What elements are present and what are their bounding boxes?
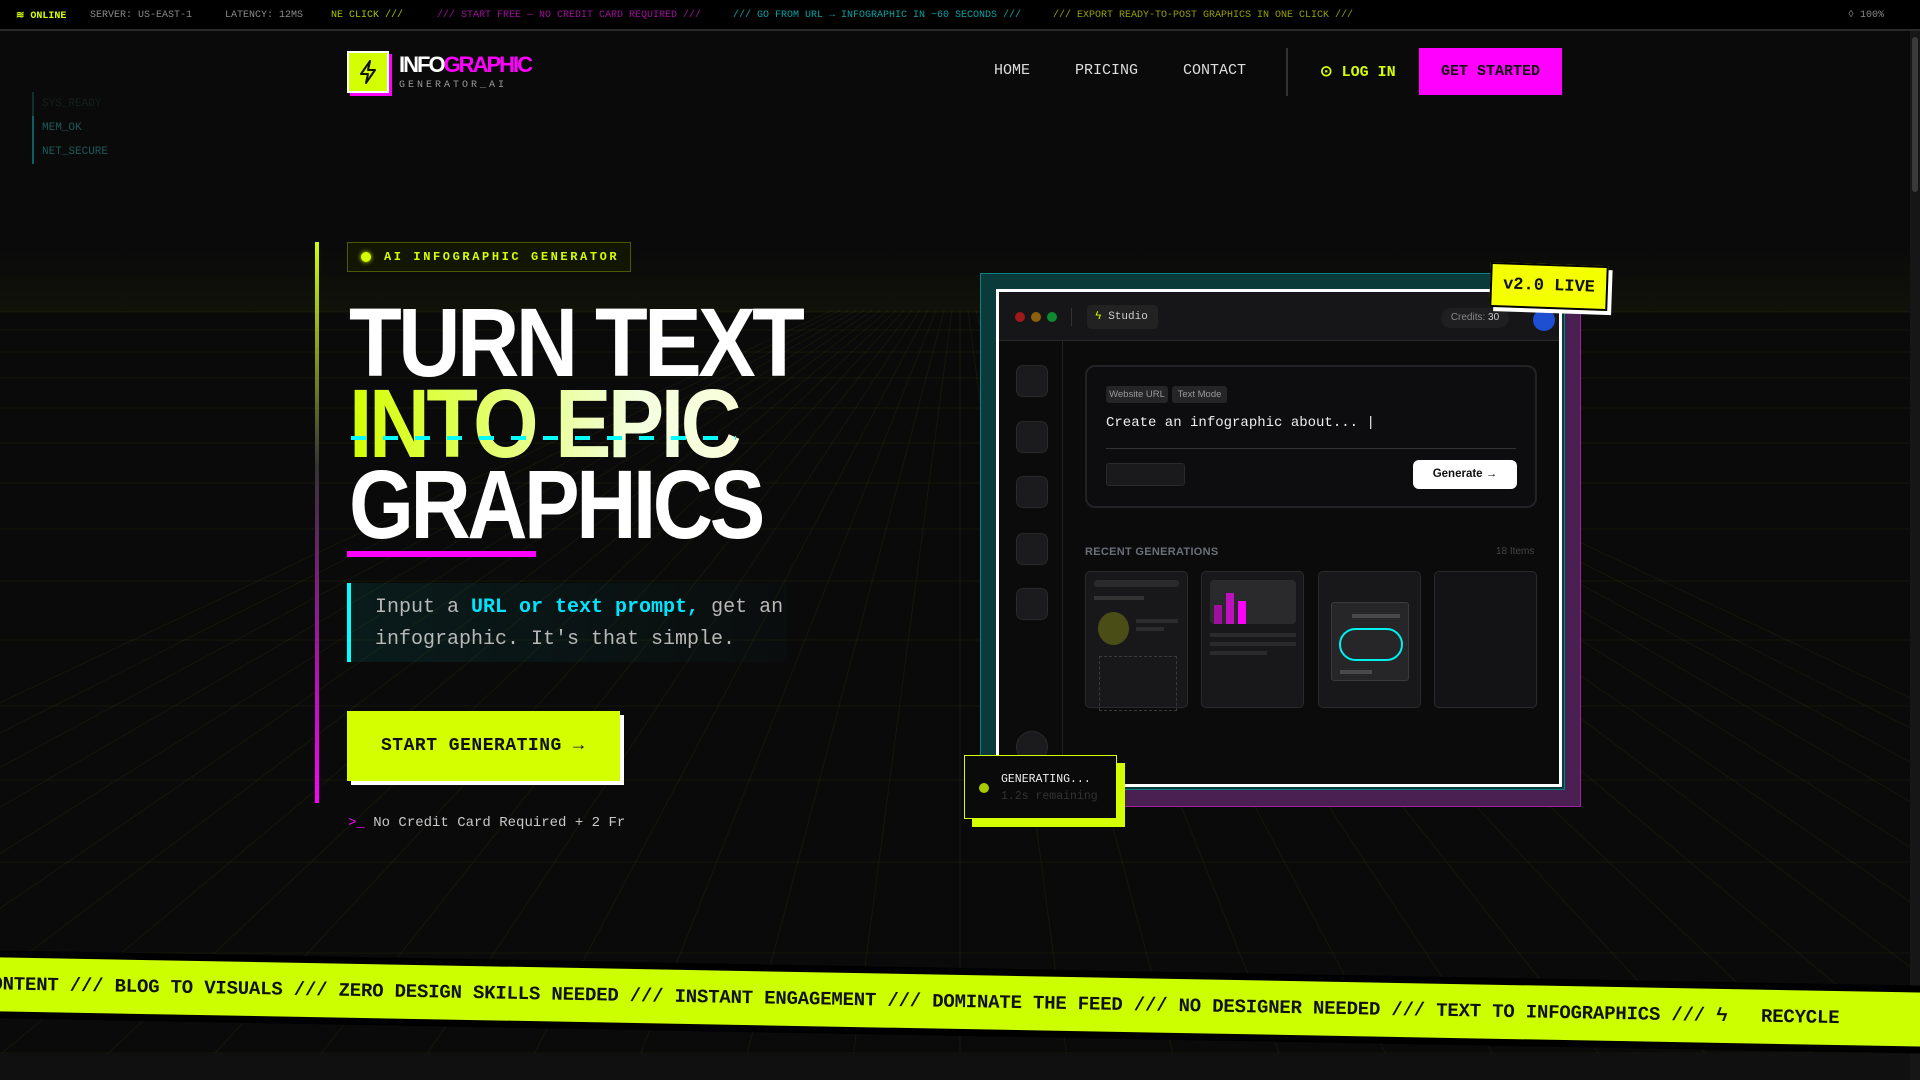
studio pill: ϟ Studio [1095,311,1148,323]
recent generations: RECENT GENERATIONS [1085,546,1219,558]
logo: INFOGRAPHIC [399,52,531,77]
button: get started: GET STARTED [1441,63,1540,80]
headline: GRAPHICS [349,450,762,559]
logo [347,51,532,96]
prompt card: Create an infographic about... | [1106,415,1375,431]
dashed cyan scanline [351,436,736,440]
app window mockup [996,289,1562,787]
studio pill [1087,305,1158,329]
top status bar: LATENCY: 12MS [225,10,303,21]
magenta underline [347,551,536,557]
prompt card: Text Mode [1178,389,1221,400]
v2.0 live badge [1489,262,1609,311]
v2.0 live badge: v2.0 LIVE [1503,275,1595,298]
ticker band: ONTENT /// BLOG TO VISUALS /// ZERO DESIGN SKILLS NEEDED /// INSTANT ENGAGEMENT /// DOMINATE THE FEED /// NO DESIGNER NEEDED /// TEXT TO INFOGRAPHICS /// ϟ RECYCLE [0,973,1840,1029]
vertical accent line [315,242,319,803]
ticker band [0,950,1920,1054]
headline: TURN TEXT [349,288,801,397]
marquee messages [331,10,1353,21]
marquee messages: NE CLICK /// [331,10,403,21]
prompt card [1085,365,1537,508]
credits pill: Credits: 30 [1451,312,1499,323]
badge [347,242,631,272]
battery: ◊ 100% [1848,10,1884,21]
mockup frames [998,291,1581,807]
navigation: HOME [994,62,1030,79]
scrollbar [1910,31,1920,1080]
navigation [994,48,1562,96]
credits pill [1441,308,1509,328]
footnote: >_ No Credit Card Required + 2 Fr [348,815,625,831]
subtitle [347,583,787,662]
generating status card: GENERATING... [1001,773,1091,786]
subtitle: Input a URL or text prompt, get an infographic. It's that simple. [375,596,783,651]
window header [999,292,1559,341]
headline: INTO EPIC [349,369,738,478]
prompt card: Website URL [1109,389,1165,400]
marquee messages: /// EXPORT READY-TO-POST GRAPHICS IN ONE CLICK /// [1053,10,1353,21]
side system labels: SYS_READY [42,98,101,110]
badge: AI INFOGRAPHIC GENERATOR [384,250,619,264]
CTA button: START GENERATING → [381,736,584,756]
top status bar: SERVER: US-EAST-1 [90,10,192,21]
logo: GENERATOR_AI [399,80,507,91]
marquee messages: /// GO FROM URL → INFOGRAPHIC IN ~60 SECONDS /// [733,10,1021,21]
navigation: CONTACT [1183,62,1246,79]
side system labels: MEM_OK [42,122,82,134]
navigation: PRICING [1075,62,1138,79]
side system labels: NET_SECURE [42,146,108,158]
headline [349,288,804,559]
generate button: Generate → [1433,468,1497,480]
status: online: ≋ ONLINE [16,11,66,22]
generating status card: 1.2s remaining [1001,790,1098,803]
top status bar [0,0,1920,31]
side system labels [32,92,108,164]
background grid [0,310,1910,1053]
icon: bolt logo [347,51,389,93]
sidebar [999,341,1063,801]
generating status card [964,755,1117,819]
marquee messages: /// START FREE — NO CREDIT CARD REQUIRED /// [437,10,701,21]
login link: ⊙ LOG IN [1320,64,1396,81]
generate button [1413,460,1517,489]
button: get started [1419,48,1562,95]
CTA button [347,711,620,781]
app window mockup: 18 Items [1496,546,1534,557]
